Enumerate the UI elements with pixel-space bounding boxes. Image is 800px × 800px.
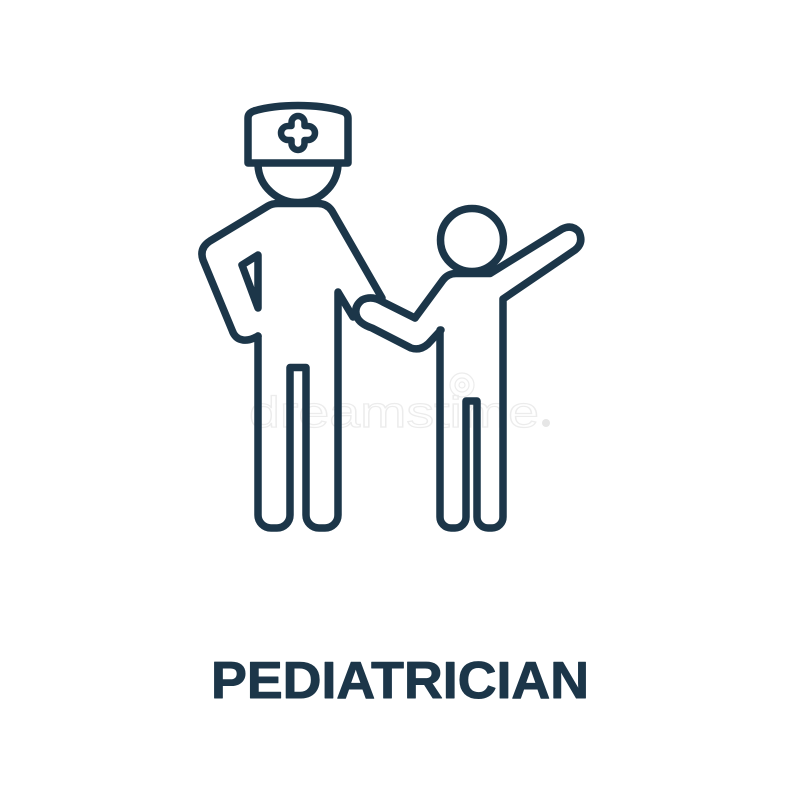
icon: pediatrician with child	[202, 106, 581, 528]
title: PEDIATRICIAN	[211, 651, 589, 709]
doctor head	[258, 165, 338, 202]
hat cross	[281, 116, 315, 150]
doctor hat	[248, 106, 348, 163]
doctor body and left arm	[202, 204, 382, 340]
child figure	[356, 208, 581, 528]
watermark	[249, 373, 550, 437]
doctor figure	[202, 106, 382, 528]
child lowered arm	[356, 298, 441, 349]
child torso and raised arm	[415, 227, 581, 528]
doctor legs	[258, 292, 353, 528]
child head	[440, 208, 504, 272]
watermark: dreamstime	[249, 388, 539, 437]
arm gap triangle	[242, 255, 258, 308]
